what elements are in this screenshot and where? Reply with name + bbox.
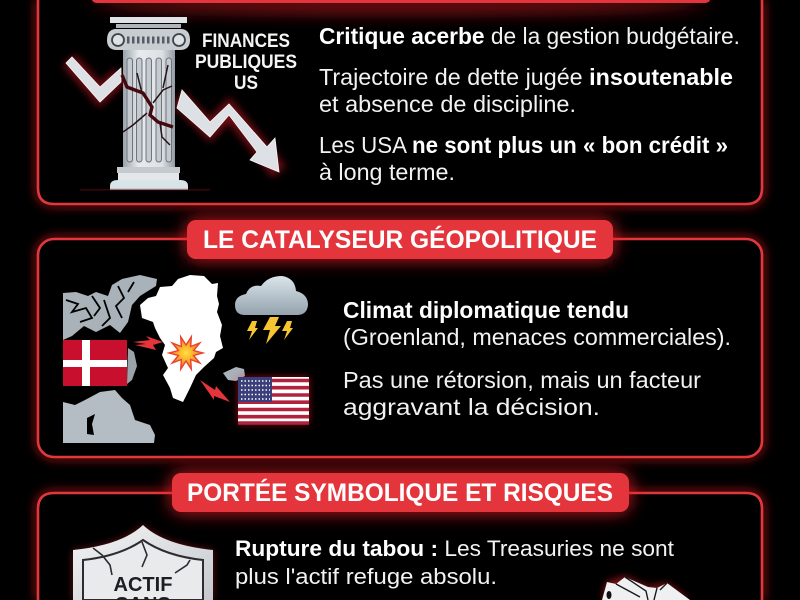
heading: portée symbolique et risques: [172, 473, 629, 512]
text block: climat diplomatique: (Groenland, menaces commerciales).: [343, 324, 731, 350]
icon: cracked shield: ACTIF: [114, 574, 172, 596]
text block: climat diplomatique: Climat diplomatique tendu: [343, 297, 629, 323]
text block: critique budgétaire: [319, 23, 740, 185]
icon: explosion: [169, 337, 203, 369]
text block: climat diplomatique: Pas une rétorsion, mais un facteur: [343, 367, 701, 393]
icon: storm cloud: [235, 276, 308, 344]
icon: lightning strikes: [133, 336, 230, 402]
text block: rupture du tabou: Rupture du tabou : Les Treasuries ne sont: [235, 536, 674, 561]
text block: rupture du tabou: [235, 536, 674, 589]
text block: rupture du tabou: plus l'actif refuge absolu.: [235, 564, 497, 589]
icon: Danish flag: [63, 340, 127, 386]
panel: le catalyseur géopolitique: [38, 220, 762, 457]
heading: le catalyseur géopolitique: [187, 220, 613, 259]
text block: critique budgétaire: et absence de discipline.: [319, 91, 576, 117]
text block: critique budgétaire: Critique acerbe de la gestion budgétaire.: [319, 23, 740, 49]
text block: climat diplomatique: [343, 297, 731, 420]
icon: map of Greenland with flags: [63, 275, 309, 443]
icon: falling gold bars: [602, 576, 690, 600]
panel: portée symbolique et risques: [38, 473, 762, 600]
label: finances publiques US: FINANCES: [202, 31, 290, 52]
text block: critique budgétaire: Les USA ne sont plus un « bon crédit »: [319, 132, 728, 158]
top heading pill: [92, 0, 710, 10]
label: finances publiques US: [195, 31, 297, 94]
text block: critique budgétaire: à long terme.: [319, 159, 455, 185]
heading: le catalyseur géopolitique: LE CATALYSEUR GÉOPOLITIQUE: [203, 225, 597, 254]
icon: cracked shield: [73, 525, 213, 600]
panel: finances publiques: [38, 0, 762, 204]
text block: climat diplomatique: aggravant la décision.: [343, 394, 600, 420]
label: finances publiques US: PUBLIQUES: [195, 52, 297, 73]
icon: US flag: [238, 377, 309, 424]
label: finances publiques US: US: [234, 73, 258, 94]
heading: portée symbolique et risques: PORTÉE SYMBOLIQUE ET RISQUES: [187, 478, 613, 507]
icon: cracked column and falling arrow: [66, 17, 279, 190]
text block: critique budgétaire: Trajectoire de dette jugée insoutenable: [319, 64, 733, 90]
